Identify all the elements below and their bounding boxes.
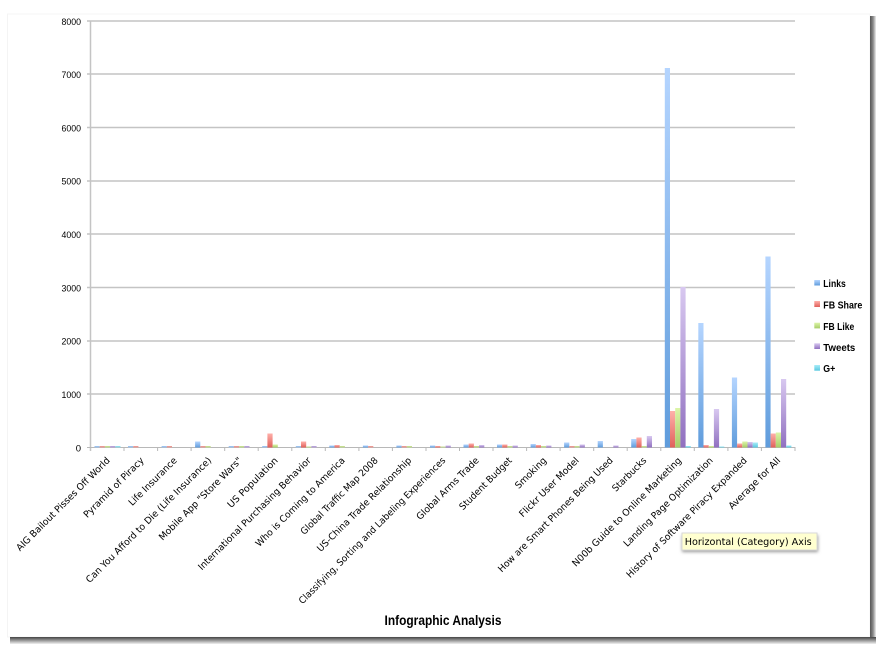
category labels: Global Traffic Map 2008: [299, 455, 381, 537]
category labels: Pyramid of Piracy: [82, 455, 147, 520]
legend: G+: [823, 363, 835, 375]
category labels: Who is Coming to America: [254, 455, 348, 549]
tooltip: [682, 533, 818, 552]
category labels: Student Budget: [457, 455, 515, 513]
bars: Starbucks: [631, 436, 652, 448]
category labels: Landing Page Optimization: [622, 455, 716, 549]
category labels: Can You Afford to Die (Life Insurance): [84, 455, 214, 585]
bars: low-value categories: [94, 434, 618, 448]
category labels: US-China Trade Relationship: [315, 455, 414, 554]
tooltip: Horizontal (Category) Axis: [685, 537, 812, 548]
category labels: How are Smart Phones Being Used: [496, 455, 616, 575]
bars: Landing Page Optimization: [698, 323, 724, 448]
y axis labels: 1000: [62, 390, 81, 401]
category labels: AIG Bailout Pisses Off World: [14, 455, 113, 554]
category labels: US Population: [225, 455, 281, 510]
y axis labels: 0: [76, 444, 81, 454]
y axis labels: 4000: [62, 230, 81, 241]
axis title: Infographic Analysis: [384, 613, 502, 628]
category labels: Average for All: [727, 455, 783, 512]
legend: Tweets: [823, 342, 855, 354]
category labels: Global Arms Trade: [414, 455, 482, 523]
category labels: N00b Guide to Online Marketing: [570, 455, 684, 569]
category labels: Smoking: [513, 455, 549, 491]
y axis labels: 5000: [62, 176, 81, 188]
category labels: Mobile App "Store Wars": [157, 455, 245, 543]
legend: FB Like: [823, 321, 854, 333]
bars: History of Software Piracy Expanded: [732, 378, 758, 448]
category labels: [14, 455, 783, 607]
bars: N00b Guide to Online Marketing: [665, 68, 691, 448]
category labels: Classifying, Sorting and Labeling Experiences: [297, 455, 448, 607]
category labels: International Purchasing Behavior: [196, 455, 314, 573]
legend: FB Share: [823, 300, 862, 312]
y axis labels: 3000: [62, 284, 81, 294]
category labels: Life Insurance: [127, 455, 180, 508]
legend: [814, 278, 862, 375]
category labels: History of Software Piracy Expanded: [624, 455, 750, 581]
grid lines and axes: [87, 21, 796, 451]
y axis labels: [62, 17, 81, 454]
y axis labels: 6000: [62, 124, 81, 134]
bars: Average for All: [765, 256, 791, 448]
y axis labels: 2000: [62, 336, 81, 348]
y axis labels: 7000: [62, 70, 81, 81]
legend: Links: [823, 278, 846, 290]
y axis labels: 8000: [62, 17, 81, 28]
category labels: Starbucks: [610, 455, 649, 494]
category labels: Flickr User Model: [517, 455, 582, 520]
